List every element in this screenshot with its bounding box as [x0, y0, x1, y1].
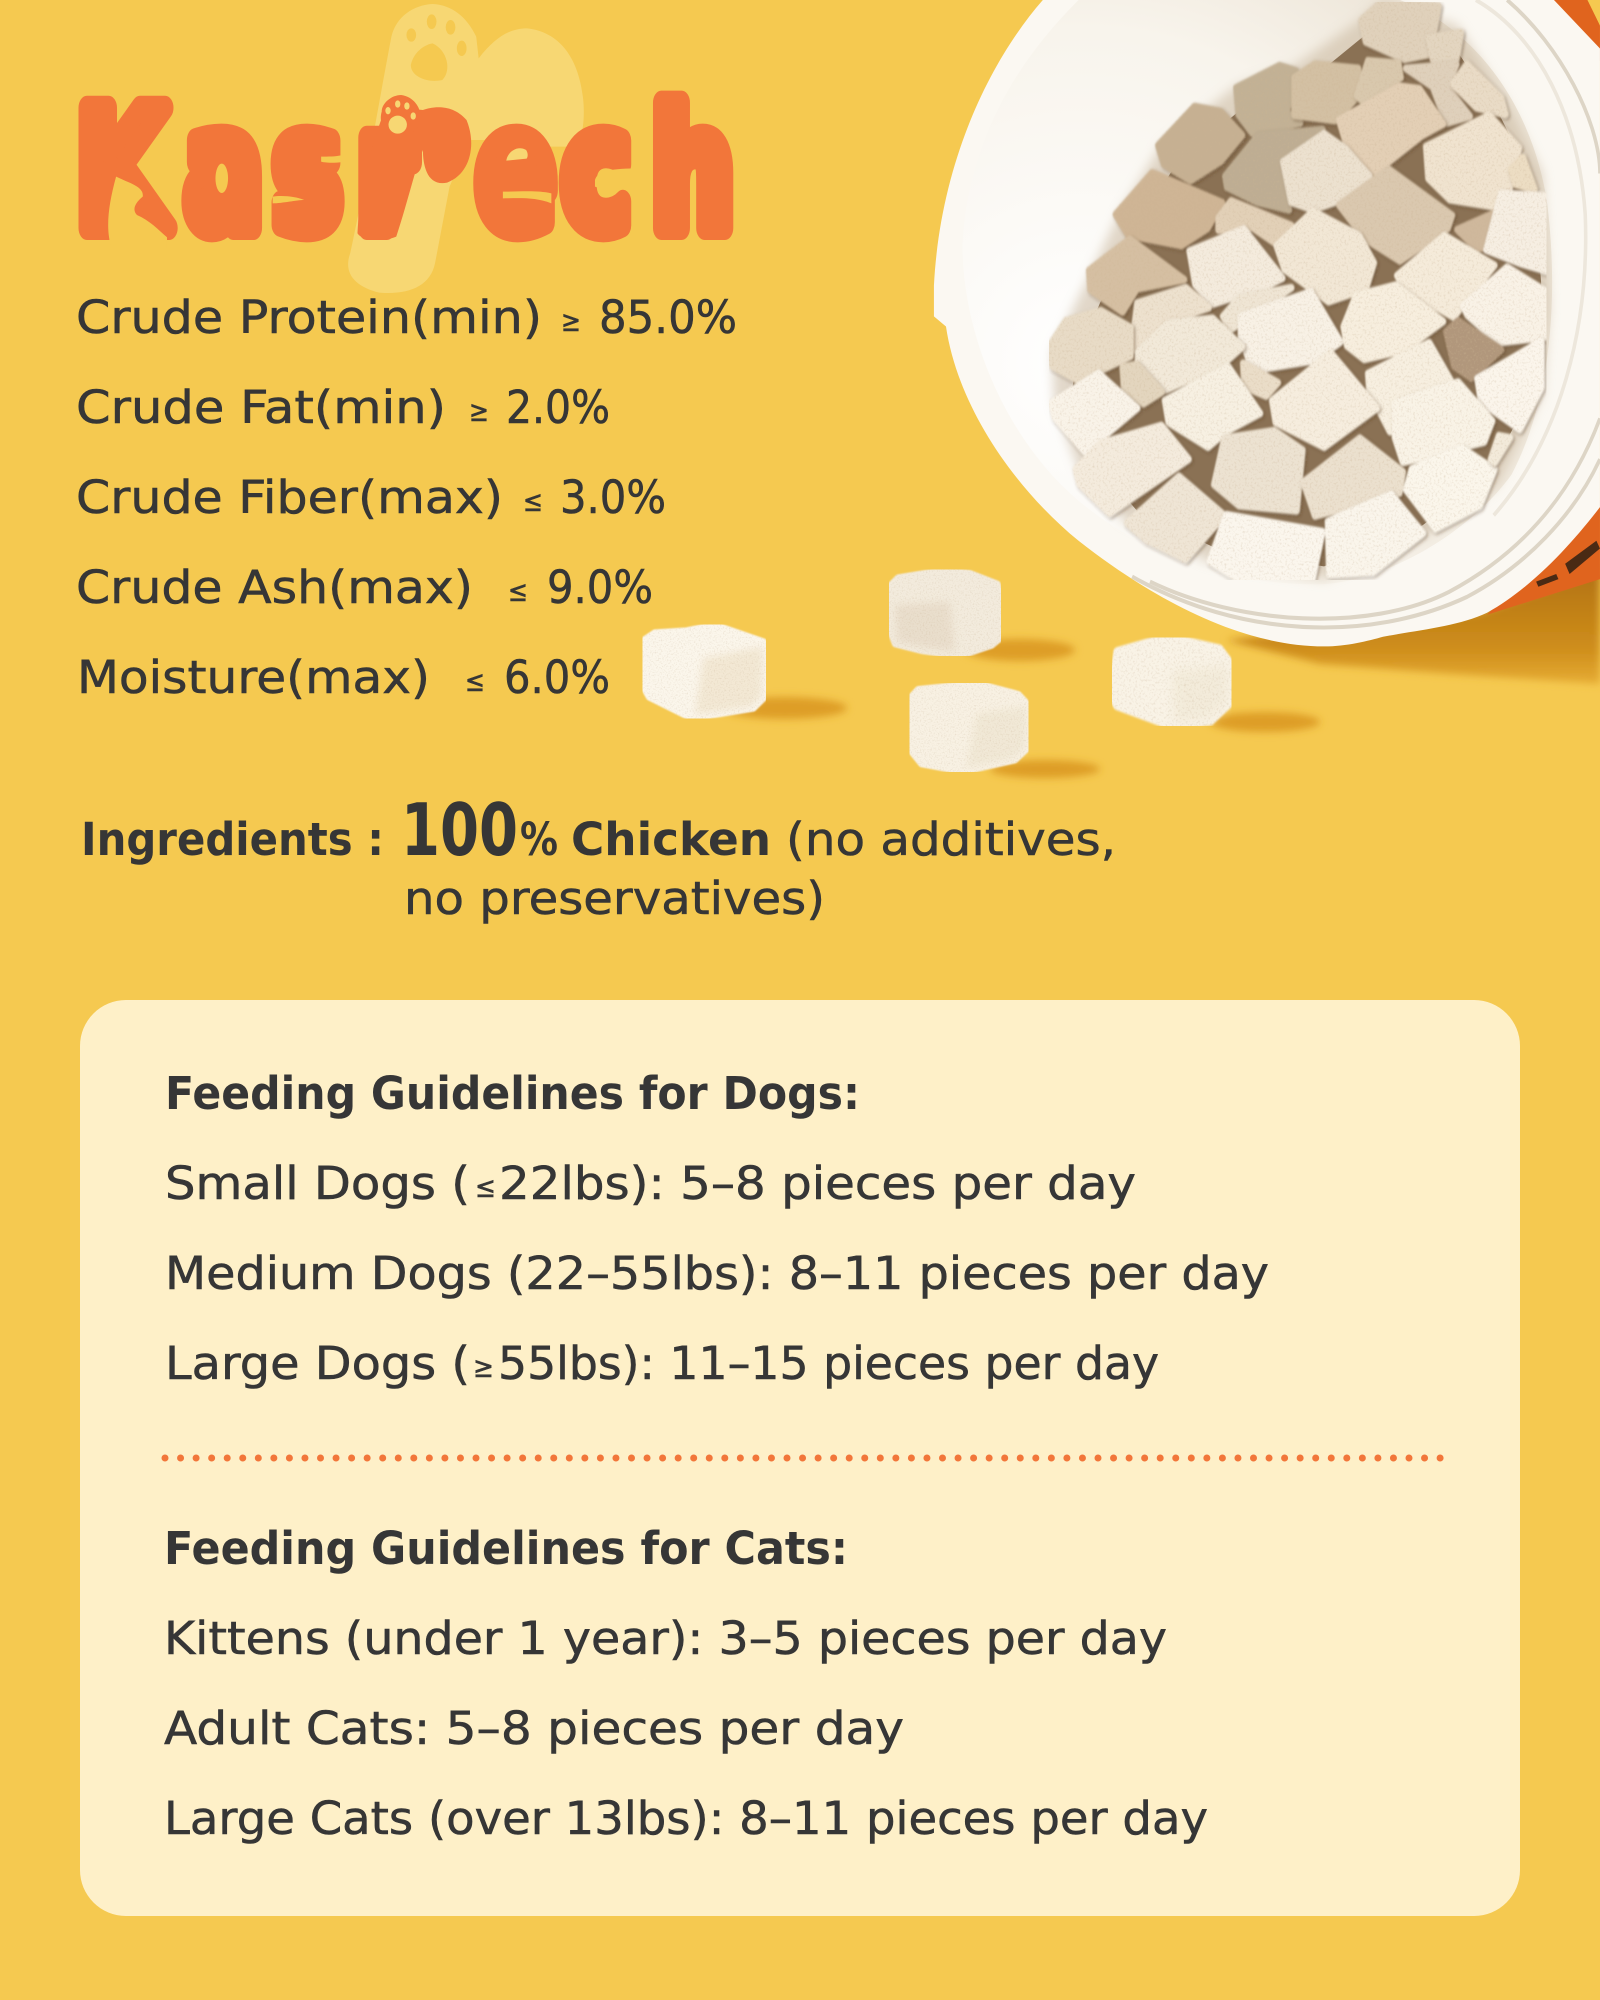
- crude protein: 85.0%: [599, 291, 737, 344]
- brand logo: [76, 4, 734, 293]
- crude fiber: [76, 471, 666, 524]
- crude protein: ≥: [561, 304, 581, 338]
- ingredients statement: 100: [401, 788, 518, 872]
- crude ash: 9.0%: [547, 561, 653, 614]
- jar orange body: [1487, 0, 1600, 615]
- small dogs: [165, 1157, 1136, 1210]
- kittens: Kittens (under 1 year): 3–5 pieces per day: [164, 1612, 1167, 1665]
- jar shadow: [1226, 570, 1600, 684]
- crude fat: Crude Fat(min): [76, 381, 446, 434]
- small dogs: 22lbs): 5–8 pieces per day: [499, 1157, 1136, 1210]
- large dogs: ≥: [473, 1350, 494, 1384]
- large dogs: 55lbs): 11–15 pieces per day: [498, 1337, 1159, 1390]
- loose cube: right: [1112, 638, 1231, 726]
- small dogs: ≤: [475, 1170, 496, 1204]
- pile dark base: [1070, 20, 1543, 566]
- product jar with freeze-dried chicken cubes: [934, 0, 1600, 646]
- logo letter counters: [215, 147, 641, 203]
- large dogs: [165, 1337, 1159, 1390]
- crude fiber: Crude Fiber(max): [76, 471, 503, 524]
- moisture: [77, 651, 610, 704]
- crude ash: ≤: [508, 574, 528, 608]
- logo ghost paw mark: [348, 4, 584, 293]
- moisture: Moisture(max): [77, 651, 430, 704]
- ingredients statement: Ingredients :: [81, 813, 384, 866]
- rim grooves: [1132, 0, 1600, 627]
- crude fat: [76, 381, 610, 434]
- crude ash: [76, 561, 653, 614]
- crude fiber: ≤: [523, 484, 543, 518]
- ingredients statement: (no additives,: [786, 813, 1116, 866]
- ingredients statement: [81, 788, 1116, 925]
- panel: feeding guidelines: [80, 1000, 1520, 1916]
- nutrition list: [76, 291, 737, 704]
- ingredients statement: no preservatives): [404, 872, 825, 925]
- ingredients statement: Chicken: [571, 813, 771, 866]
- heading: dogs: Feeding Guidelines for Dogs:: [165, 1067, 860, 1120]
- loose cube: left: [643, 625, 766, 718]
- large dogs: Large Dogs (: [165, 1337, 470, 1390]
- logo wordmark: Kasrech: [76, 75, 734, 267]
- moisture: ≤: [465, 664, 485, 698]
- heading: cats: Feeding Guidelines for Cats:: [164, 1522, 848, 1575]
- crude fat: 2.0%: [506, 381, 610, 434]
- jar label marks: [1536, 541, 1600, 587]
- jar rim: [934, 0, 1600, 646]
- adult cats: Adult Cats: 5–8 pieces per day: [164, 1702, 904, 1755]
- icon: orange paw: [381, 95, 420, 135]
- loose cube: front: [910, 683, 1028, 772]
- loose cube: back: [889, 570, 1001, 656]
- pile shadow on wall: [1052, 0, 1550, 579]
- cubes in jar: [1049, 2, 1546, 580]
- logo letter details: [108, 95, 641, 248]
- medium dogs: Medium Dogs (22–55lbs): 8–11 pieces per day: [165, 1247, 1269, 1300]
- ingredients statement: %: [520, 813, 558, 866]
- crude protein: [76, 291, 737, 344]
- moisture: 6.0%: [504, 651, 610, 704]
- jar inner wall: [962, 0, 1552, 584]
- crude fat: ≥: [469, 394, 489, 428]
- crude fiber: 3.0%: [560, 471, 666, 524]
- crude protein: Crude Protein(min): [76, 291, 542, 344]
- cube shadows: [723, 639, 1320, 778]
- large cats: Large Cats (over 13lbs): 8–11 pieces per day: [164, 1792, 1208, 1845]
- small dogs: Small Dogs (: [165, 1157, 470, 1210]
- crude ash: Crude Ash(max): [76, 561, 473, 614]
